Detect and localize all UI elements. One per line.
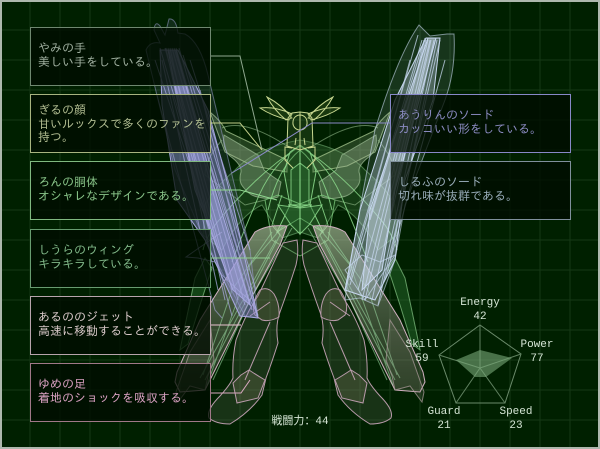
callout: jet: 高速に移動することができる。 [38, 324, 206, 336]
callout: hand: 美しい手をしている。 [38, 56, 158, 68]
callout: hand: やみの手 [38, 42, 86, 54]
callout: sword A: カッコいい形をしている。 [398, 122, 542, 134]
callout: jet [30, 296, 211, 355]
label: energy: Energy [460, 297, 500, 309]
callout: wing: キラキラしている。 [38, 258, 146, 270]
label: energy: 42 [473, 311, 487, 323]
right sword [345, 25, 454, 306]
callout: sword B: 切れ味が抜群である。 [398, 190, 518, 202]
label: skill [405, 339, 438, 365]
callout: sword A [390, 94, 571, 153]
callout: wing: しうらのウィング [38, 244, 134, 256]
label: power: 77 [530, 353, 544, 365]
callout: sword B: しるふのソード [398, 176, 482, 188]
callout: torso [30, 161, 211, 220]
label: energy [460, 297, 500, 323]
callout: face [30, 94, 211, 153]
callout: face: 甘いルックスで多くのファンを [38, 118, 206, 130]
battle power: 戦闘力：44 [271, 416, 329, 428]
callout: foot [30, 363, 211, 422]
callout: jet: あるののジェット [38, 311, 134, 323]
callout: foot: ゆめの足 [38, 378, 86, 390]
robot body [175, 97, 425, 424]
label: guard [427, 406, 460, 432]
callout: torso: オシャレなデザインである。 [38, 190, 194, 202]
left sword [146, 19, 258, 318]
callout: hand [30, 27, 211, 86]
label: speed: Speed [499, 406, 532, 418]
callout: sword A: あうりんのソード [398, 109, 494, 121]
callout: torso: ろんの胴体 [38, 176, 98, 188]
label: power: Power [520, 339, 554, 351]
label: speed: 23 [509, 420, 523, 432]
label: power [520, 339, 554, 365]
callout: face: 持つ。 [38, 131, 74, 143]
callout: face: ぎるの顔 [38, 104, 86, 116]
callout: wing [30, 229, 211, 288]
label: skill: 59 [415, 353, 429, 365]
label: guard: Guard [427, 406, 460, 418]
label: guard: 21 [437, 420, 451, 432]
label: skill: Skill [405, 339, 438, 351]
callout: sword B [390, 161, 571, 220]
callout: foot: 着地のショックを吸収する。 [38, 392, 194, 404]
label: speed [499, 406, 532, 432]
connector lines [211, 56, 390, 393]
